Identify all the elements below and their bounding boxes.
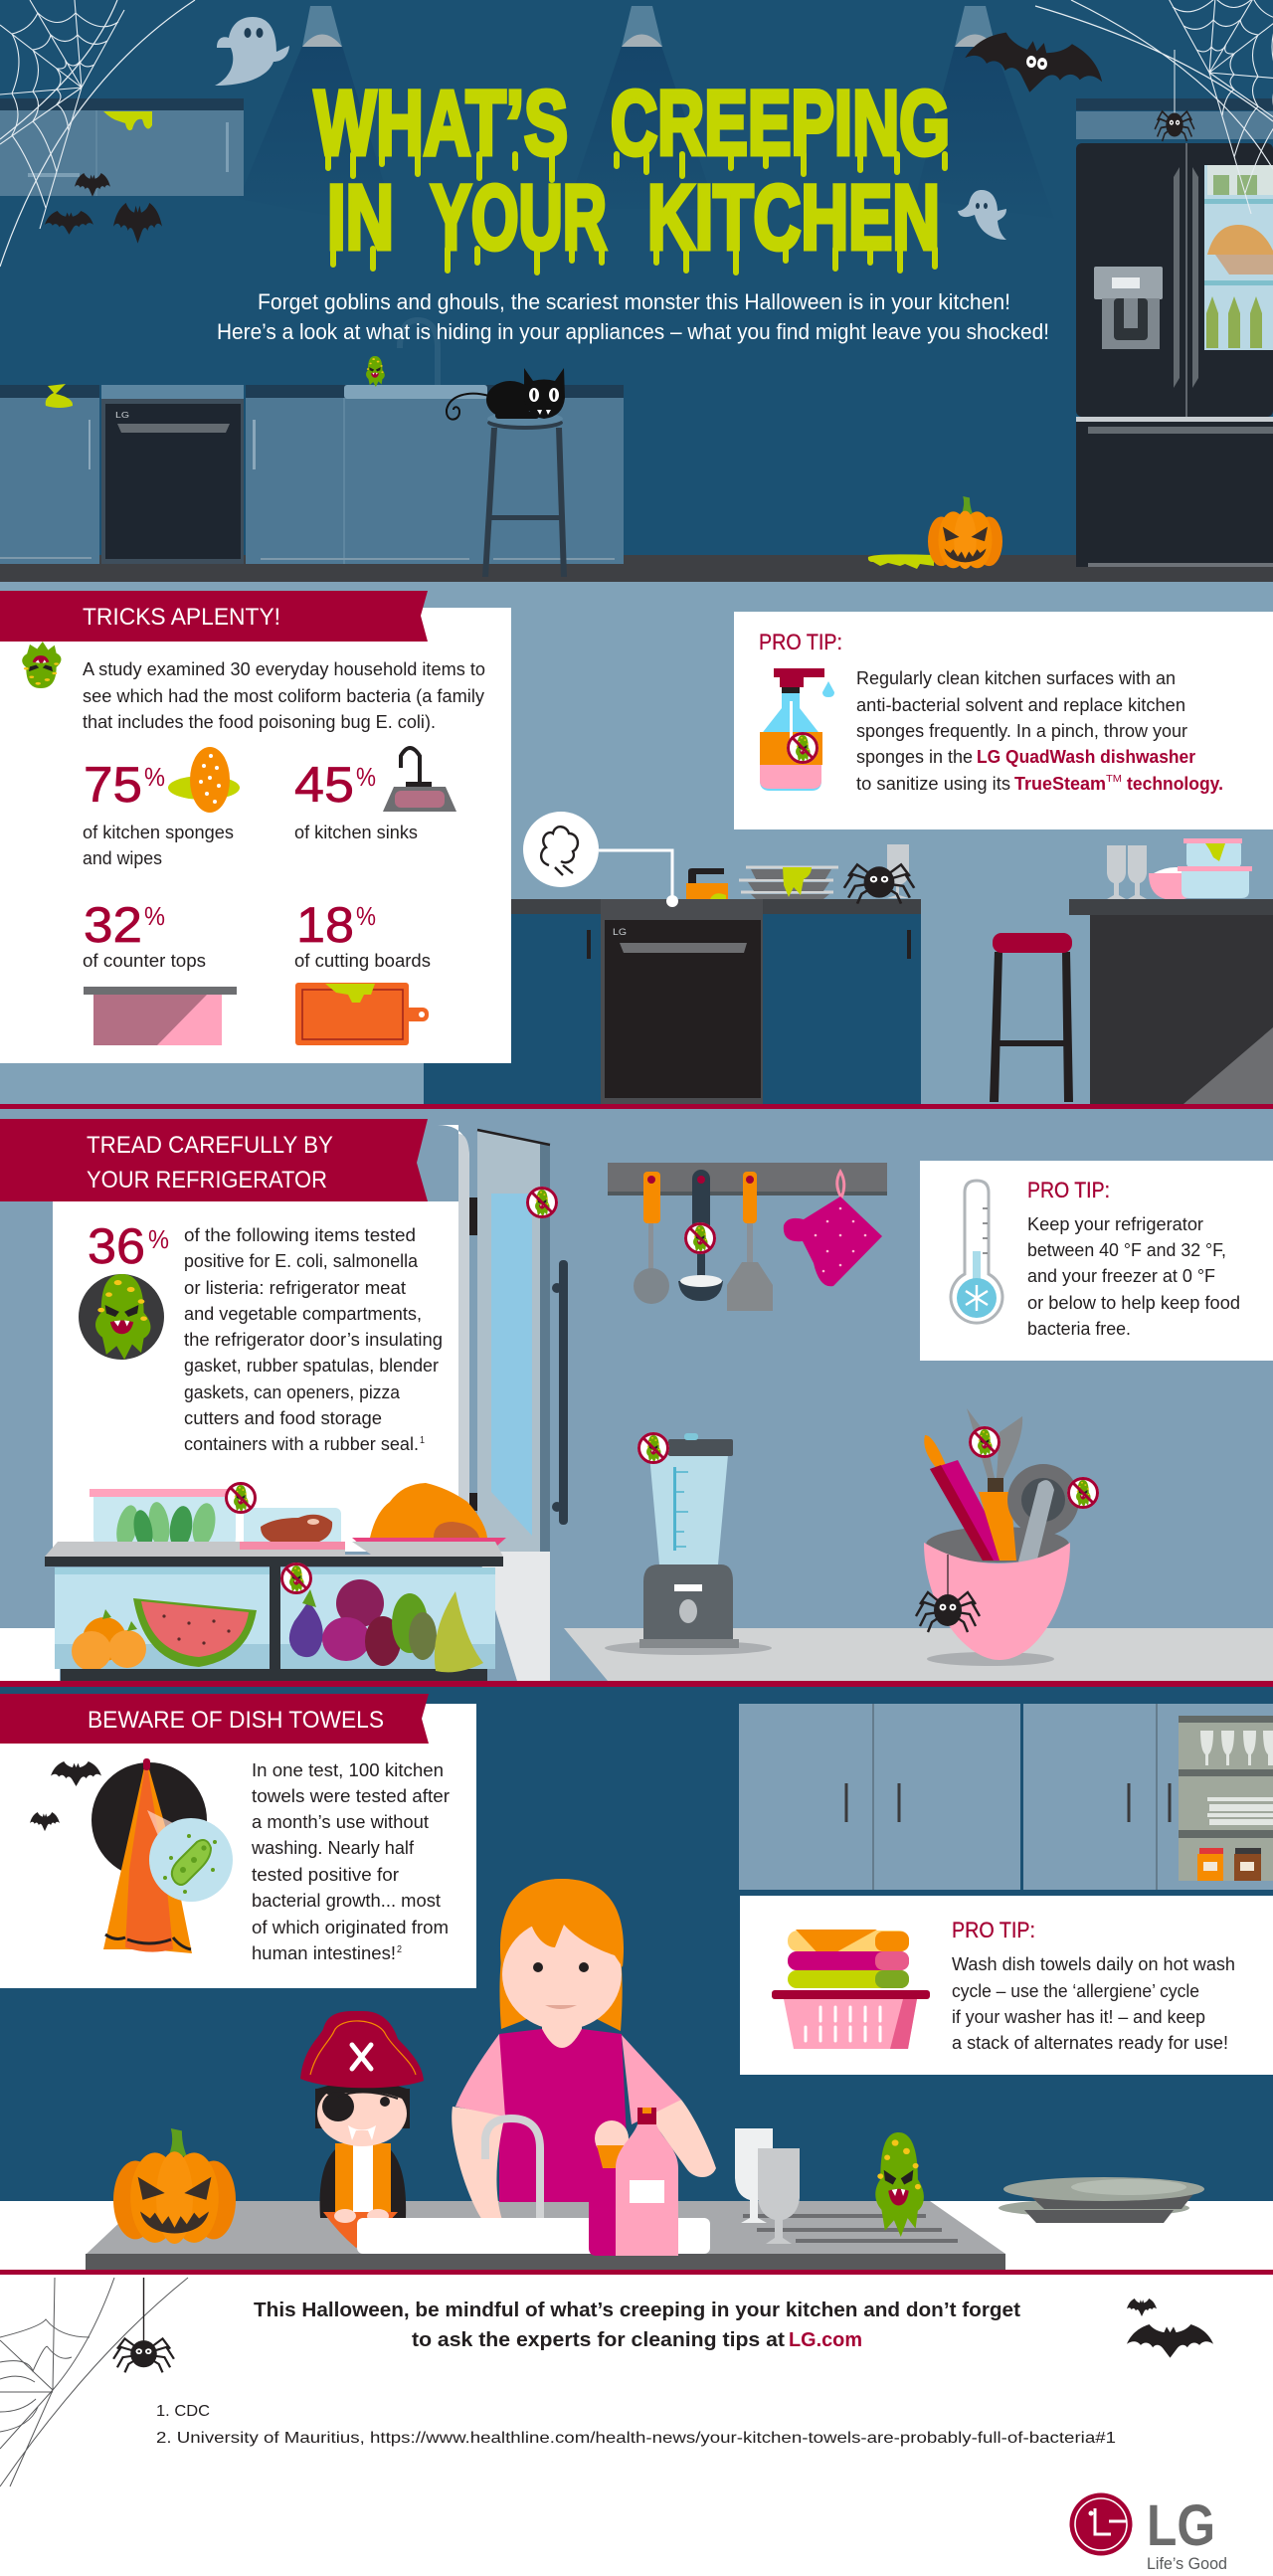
LG logo: LG: [1147, 2493, 1215, 2558]
right counter island: [1069, 899, 1273, 1104]
body text: a stack of alternates ready for use!: [952, 2033, 1228, 2053]
subtitle: Forget goblins and ghouls, the scariest monster this Halloween is in your kitchen!: [258, 289, 1010, 314]
woman washing dishes: [452, 1879, 716, 2220]
intro text: A study examined 30 everyday household items to: [83, 659, 485, 679]
icon: spider on counter: [844, 864, 914, 904]
stat: 36%: [88, 1218, 169, 1274]
title: WHAT’S: [314, 73, 568, 174]
icon: hanging towel with magnified germ: [91, 1758, 233, 1953]
lower cabinets and dishwasher: [0, 320, 624, 564]
fridge shelf: [45, 1542, 503, 1566]
icon: large bat: [961, 26, 1108, 104]
stacked plates: [999, 2177, 1204, 2223]
monster peeking upside down: [22, 642, 61, 688]
ladle: [678, 1170, 723, 1301]
stat: 75% sponges: [83, 757, 234, 868]
body text: [251, 1760, 450, 1963]
icon: sponge: [168, 747, 240, 813]
body text: Keep your refrigerator: [1027, 1214, 1203, 1234]
LG logo: [1070, 2492, 1227, 2573]
body text: cutters and food storage: [184, 1408, 382, 1428]
heading: PRO TIP:: [952, 1918, 1035, 1942]
dishwasher: [601, 899, 763, 1104]
stat: 45% sinks: %: [356, 762, 376, 792]
scrub brush: [686, 868, 728, 899]
body text: technology.: [1127, 774, 1223, 794]
open fridge door: [477, 1130, 550, 1681]
body text: gasket, rubber spatulas, blender: [184, 1356, 439, 1376]
icons: cobwebs: [0, 0, 1273, 267]
title: CREEPING: [611, 73, 950, 174]
heading ribbon: [0, 1119, 428, 1201]
kitchen scene: tricks section: [424, 812, 1273, 1104]
background: hero wall: [0, 0, 1273, 555]
wine glass behind spider: [887, 844, 909, 898]
ceiling lamps with light beams: [239, 6, 1054, 229]
sink basin: [357, 2218, 710, 2254]
body text: containers with a rubber seal.: [184, 1434, 419, 1454]
crisper divider and base: [61, 1566, 487, 1681]
heading ribbon: TRICKS APLENTY!: [83, 604, 280, 631]
stat: 36%: 36: [88, 1218, 145, 1274]
footer cobweb: [0, 2278, 188, 2486]
dishwashing scene: [86, 1879, 1204, 2270]
body text: In one test, 100 kitchen: [252, 1760, 444, 1780]
glasses: [1107, 845, 1147, 899]
upper left cabinet: [0, 98, 244, 196]
background: tricks section wall: [0, 582, 1273, 1104]
body text: tested positive for: [252, 1865, 399, 1885]
body text: Wash dish towels daily on hot wash: [952, 1954, 1235, 1974]
body text: or below to help keep food: [1027, 1293, 1240, 1313]
closing message: LG.com: [789, 2328, 862, 2351]
stat: 32% counter tops: of counter tops: [83, 951, 206, 971]
icon: spider hanging from web: [1155, 50, 1194, 141]
references: [156, 2403, 1116, 2447]
icon: spider on thread: [113, 2278, 174, 2372]
heading ribbon: [0, 591, 428, 642]
background: hero floor: [0, 555, 1273, 582]
upper right cabinet: [1076, 98, 1273, 139]
LG logo: Life’s Good: [1147, 2554, 1227, 2573]
icon: spray bottle: [760, 668, 834, 791]
upper cabinets with glass door: [739, 1704, 1273, 1890]
heading: PRO TIP:: [759, 630, 842, 654]
body text: [1027, 1214, 1240, 1339]
stat: 45% sinks: 45: [294, 757, 354, 813]
stat: 32% counter tops: [83, 897, 206, 971]
fridge door handle: [552, 1260, 568, 1525]
base cabinets: [424, 914, 921, 1104]
title: IN: [327, 167, 394, 269]
countertop: [86, 2201, 1005, 2270]
background: refrigerator section wall: [0, 1109, 1273, 1681]
body text: or listeria: refrigerator meat: [184, 1278, 406, 1298]
blender: [605, 1432, 772, 1655]
stat: 18% cutting boards: [294, 897, 431, 971]
icon: cutting board: [295, 983, 429, 1045]
panel: tread carefully: [0, 1119, 443, 1454]
slime drip on lower counter: [46, 384, 73, 408]
body text: bacteria free.: [1027, 1319, 1131, 1339]
intro text: that includes the food poisoning bug E. coli).: [83, 712, 436, 732]
body text: towels were tested after: [252, 1786, 450, 1806]
subtitle: [217, 289, 1049, 344]
jack-o-lantern and slime puddle: [868, 496, 1002, 569]
stat: 45% sinks: of kitchen sinks: [294, 823, 418, 842]
left crisper with fruit: [55, 1567, 270, 1671]
roast turkey: [352, 1483, 506, 1555]
icon: kitchen sink: [383, 748, 456, 812]
body text: washing. Nearly half: [251, 1838, 415, 1858]
stat: 36%: %: [148, 1224, 169, 1254]
body text: of the following items tested: [184, 1225, 416, 1245]
hero kitchen scene: [0, 6, 1273, 577]
body text: a month’s use without: [252, 1812, 429, 1832]
panel: pro tip towels: [740, 1896, 1273, 2075]
stat: 45% sinks: [294, 757, 418, 842]
heading: PRO TIP:: [1027, 1178, 1110, 1202]
stat: 32% counter tops: 32: [84, 897, 142, 953]
intro text: [83, 659, 485, 732]
body text: if your washer has it! – and keep: [952, 2007, 1205, 2027]
body text: between 40 °F and 32 °F,: [1027, 1240, 1226, 1260]
heading ribbon: BEWARE OF DISH TOWELS: [88, 1707, 384, 1734]
skimmer: [634, 1172, 669, 1304]
body text: human intestines!: [252, 1943, 396, 1963]
body text: [952, 1954, 1235, 2053]
body text: gaskets, can openers, pizza: [184, 1382, 401, 1402]
body text: TrueSteam: [1014, 774, 1106, 794]
dishwasher: LG: [613, 927, 627, 937]
icons: footer bats: [1127, 2299, 1213, 2358]
heading ribbon: YOUR REFRIGERATOR: [87, 1167, 327, 1194]
stat: 75% sponges: and wipes: [83, 848, 162, 868]
black cat: [447, 368, 565, 420]
text: LG dishwasher mark: LG: [115, 411, 129, 420]
panel: pro tip sponges: [734, 612, 1273, 829]
pumpkin: [113, 2128, 236, 2244]
icon: laundry basket with folded towels: [772, 1930, 930, 2049]
bar stool: [482, 412, 567, 577]
body text: and vegetable compartments,: [184, 1304, 422, 1324]
icon: monster badge: [79, 1274, 164, 1360]
glass shelves: [1179, 1716, 1273, 1881]
icon: ghost: [215, 17, 289, 86]
stat: 75% sponges: 75: [84, 757, 142, 813]
body text: cycle – use the ‘allergiene’ cycle: [952, 1981, 1199, 2001]
stack of plates with slime: [739, 867, 838, 899]
icon: thermometer: [951, 1181, 1002, 1323]
panel: beware of dish towels: [0, 1694, 476, 1988]
footer rule: [0, 2270, 1273, 2275]
stat: 18% cutting boards: of cutting boards: [294, 951, 431, 971]
stat: 18% cutting boards: 18: [296, 897, 354, 953]
spatula: [727, 1172, 773, 1311]
panel: pro tip refrigerator: [920, 1161, 1273, 1361]
icon: counter top: [84, 987, 237, 1045]
stat: 18% cutting boards: %: [356, 901, 376, 931]
faint faucet: [400, 320, 438, 385]
body text: to sanitize using its: [856, 774, 1010, 794]
intro text: see which had the most coliform bacteria (a family: [83, 686, 484, 706]
lettuce container: [90, 1489, 236, 1553]
body text: 2: [397, 1944, 402, 1955]
body text: the refrigerator door’s insulating: [184, 1330, 443, 1350]
utensil crock: [916, 1408, 1099, 1666]
countertop: [511, 899, 921, 914]
panel background: [0, 608, 511, 1063]
body text: sponges in the: [856, 747, 973, 767]
icon: spider on crock: [916, 1555, 980, 1632]
body text: LG QuadWash dishwasher: [977, 747, 1195, 767]
food containers and bowl: [1149, 838, 1252, 899]
body text: of which originated from: [252, 1918, 449, 1937]
icon: small ghost: [958, 190, 1006, 240]
pirate child: [300, 2011, 424, 2248]
closing message: [254, 2299, 1020, 2351]
meat tray: [240, 1508, 345, 1550]
body text: [856, 668, 1223, 794]
pink dish soap bottle: [589, 2108, 678, 2256]
red bar stool: [990, 933, 1073, 1102]
body text: [184, 1225, 443, 1454]
title: [314, 73, 950, 273]
body text: and your freezer at 0 °F: [1027, 1266, 1215, 1286]
right crisper with vegetables: [280, 1567, 495, 1672]
icons: no-germ stickers: [225, 1187, 558, 1594]
oven mitt: [784, 1172, 882, 1286]
title: KITCHEN: [647, 167, 940, 269]
closing message: This Halloween, be mindful of what’s creeping in your kitchen and don’t forget: [254, 2299, 1020, 2321]
steam callout icon with connector: [523, 812, 678, 907]
green monster: [875, 2132, 924, 2237]
icons: small bats: [45, 173, 162, 244]
body text: anti-bacterial solvent and replace kitchen: [856, 695, 1185, 715]
monster on counter: [366, 356, 385, 387]
fridge interior: [53, 1125, 469, 1552]
faucet: [485, 2118, 540, 2220]
heading ribbon: TREAD CAREFULLY BY: [87, 1132, 333, 1159]
body text: bacterial growth... most: [252, 1891, 441, 1911]
body text: positive for E. coli, salmonella: [184, 1251, 419, 1271]
panel: tricks aplenty: [0, 591, 511, 1063]
subtitle: Here’s a look at what is hiding in your appliances – what you find might leave you shocked!: [217, 319, 1049, 344]
background: dish towels section wall: [0, 1687, 1273, 2201]
title: YOUR: [431, 167, 607, 269]
refrigerator scene: [0, 1125, 1273, 1681]
stat: 32% counter tops: %: [144, 901, 165, 931]
floor: [0, 1628, 1273, 1681]
refrigerator: [1076, 50, 1273, 567]
heading ribbon: [0, 1694, 429, 1744]
wine glasses on counter: [735, 2128, 800, 2244]
body text: Regularly clean kitchen surfaces with an: [856, 668, 1176, 688]
stat: 75% sponges: of kitchen sponges: [83, 823, 234, 842]
stat: 75% sponges: %: [144, 762, 165, 792]
body text: TM: [1106, 774, 1122, 785]
references: 1. CDC: [156, 2403, 210, 2420]
closing message: to ask the experts for cleaning tips at: [412, 2328, 785, 2351]
body text: sponges frequently. In a pinch, throw your: [856, 721, 1187, 741]
references: 2. University of Mauritius, https://www.healthline.com/health-news/your-kitchen-towels-are-probably-full-of-bacteria#1: [156, 2430, 1116, 2447]
icons: bats: [30, 1761, 101, 1831]
utensil rail: [608, 1163, 887, 1311]
body text: 1: [420, 1435, 425, 1446]
background: footer: [0, 2201, 1273, 2576]
